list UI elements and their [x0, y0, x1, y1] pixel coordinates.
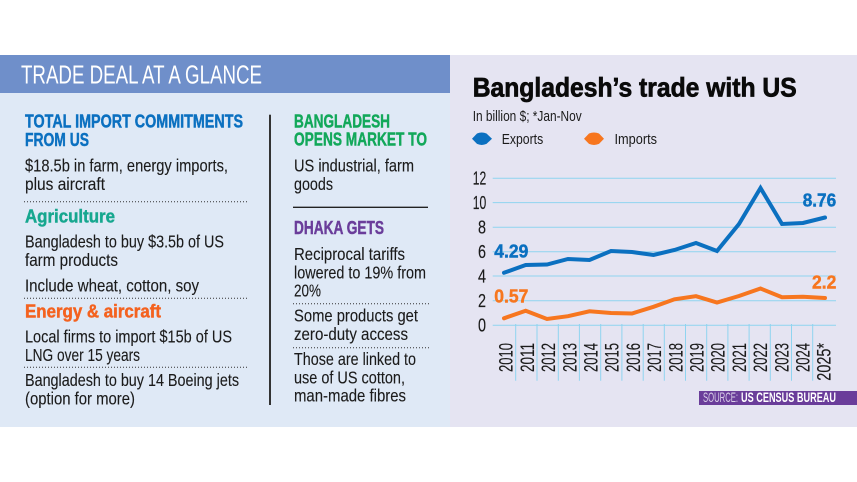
x axis year labels: 2021	[729, 343, 751, 372]
line chart	[473, 168, 836, 381]
section: total import commitments: $18.5b in farm, energy imports,	[25, 156, 228, 176]
section: Dhaka gets: lowered to 19% from	[294, 262, 426, 282]
section: total import commitments: plus aircraft	[25, 174, 105, 194]
y axis labels: 8	[478, 216, 486, 238]
y axis labels	[473, 168, 486, 336]
y axis labels: 6	[478, 241, 486, 262]
section: agriculture	[24, 207, 248, 298]
section: total import commitments: TOTAL IMPORT COMMITMENTS	[25, 112, 243, 132]
x axis year labels: 2016	[623, 343, 645, 372]
section: agriculture: farm products	[25, 250, 118, 270]
legend: Imports	[614, 131, 657, 148]
x axis year labels: 2024	[792, 343, 814, 372]
section: energy and aircraft: (option for more)	[25, 388, 135, 408]
section: Dhaka gets: Reciprocal tariffs	[294, 244, 405, 264]
section: Dhaka gets: DHAKA GETS	[294, 218, 384, 238]
x axis year labels: 2018	[665, 343, 687, 372]
x axis year labels: 2022	[750, 343, 772, 372]
data labels: 8.76	[803, 190, 836, 211]
x axis year labels: 2019	[686, 343, 708, 372]
y axis labels: 4	[478, 266, 486, 286]
section: Dhaka gets	[293, 218, 429, 406]
x axis year labels: 2011	[517, 343, 539, 372]
panel: Bangladesh's trade with US	[450, 55, 857, 427]
data labels: 2.2	[812, 272, 836, 293]
x axis year labels: 2012	[538, 343, 560, 372]
x axis year labels: 2013	[559, 343, 581, 372]
section: Bangladesh opens market to: US industrial, farm	[294, 156, 414, 176]
y axis labels: 0	[478, 315, 486, 336]
data labels: 4.29	[494, 240, 528, 261]
section: Bangladesh opens market to: BANGLADESH	[294, 111, 390, 131]
section: agriculture: Include wheat, cotton, soy	[25, 276, 199, 296]
chart title: Bangladesh’s trade with US	[473, 73, 797, 103]
section: Bangladesh opens market to	[293, 111, 428, 207]
y axis labels: 10	[473, 192, 486, 213]
header band	[0, 55, 450, 93]
data labels: 0.57	[494, 286, 528, 307]
section: Bangladesh opens market to: goods	[294, 174, 333, 194]
section: energy and aircraft: LNG over 15 years	[25, 345, 140, 365]
section: Dhaka gets: man-made fibres	[294, 386, 406, 406]
section: Dhaka gets: 20%	[294, 281, 321, 301]
section: total import commitments: FROM US	[25, 130, 89, 150]
panel: trade deal at a glance	[0, 55, 450, 427]
data labels	[494, 190, 836, 307]
y axis labels: 12	[473, 168, 486, 188]
x axis year labels: 2015	[602, 343, 624, 372]
x axis year labels: 2010	[496, 343, 518, 372]
column divider	[269, 115, 271, 405]
x axis year labels: 2020	[708, 343, 730, 372]
x axis year labels	[496, 343, 836, 381]
section: agriculture: Bangladesh to buy $3.5b of US	[25, 231, 224, 251]
section: energy and aircraft: Local firms to import $15b of US	[25, 327, 232, 347]
section: energy and aircraft: Bangladesh to buy 14 Boeing jets	[25, 370, 239, 390]
y axis labels: 2	[478, 290, 486, 311]
x axis year labels: 2014	[580, 343, 602, 372]
grid lines and ticks	[493, 178, 836, 381]
header band: TRADE DEAL AT A GLANCE	[21, 61, 262, 89]
legend: Exports	[502, 131, 543, 148]
x axis year labels: 2023	[771, 343, 793, 372]
section: Dhaka gets: zero-duty access	[294, 324, 408, 344]
section: Bangladesh opens market to: OPENS MARKET TO	[294, 130, 427, 150]
legend	[472, 131, 657, 148]
section: Dhaka gets: Those are linked to	[294, 349, 416, 369]
section: total import commitments	[24, 112, 248, 202]
section: agriculture: Agriculture	[25, 207, 115, 227]
subtitle: In billion $; *Jan-Nov	[473, 108, 582, 125]
section: energy and aircraft	[24, 301, 248, 408]
exports line	[504, 188, 825, 273]
x axis year labels: 2017	[644, 343, 666, 372]
x axis year labels: 2025*	[814, 343, 836, 381]
source bar: SOURCE:	[703, 389, 738, 405]
section: energy and aircraft: Energy & aircraft	[25, 301, 161, 321]
section: Dhaka gets: Some products get	[294, 306, 418, 326]
section: Dhaka gets: use of US cotton,	[294, 367, 405, 387]
imports line	[504, 288, 825, 319]
